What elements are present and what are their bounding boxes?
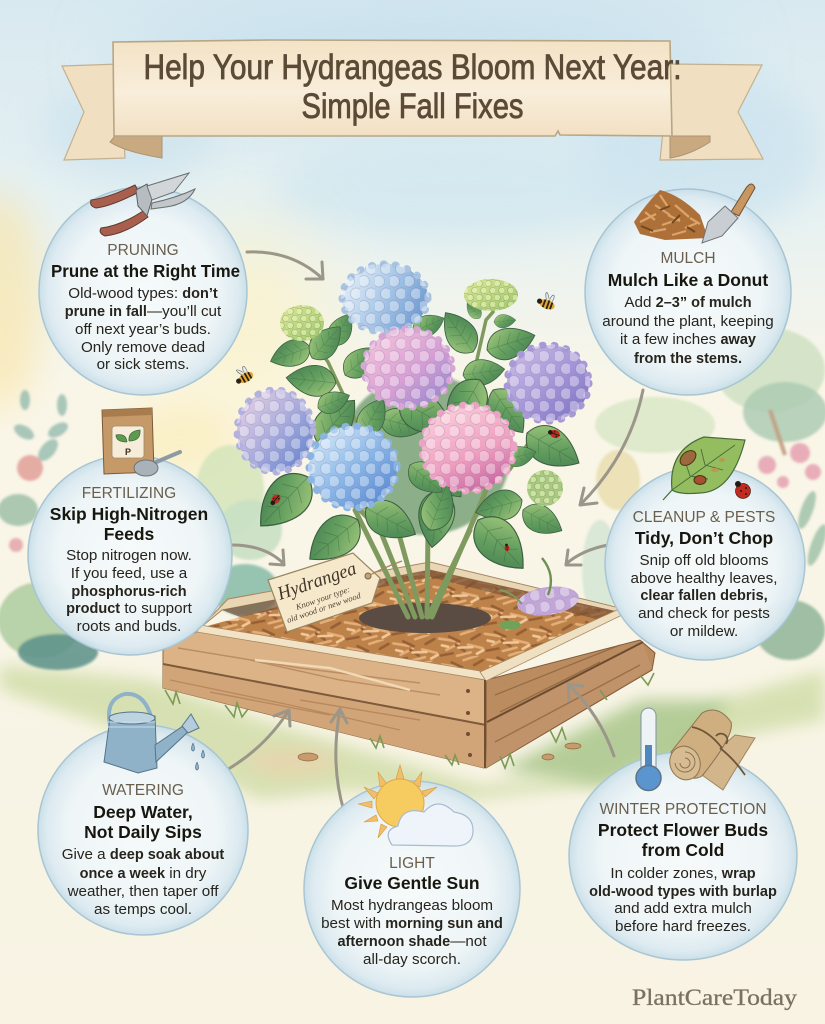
body text: above healthy leaves, bbox=[631, 570, 777, 587]
logo: PlantCareToday bbox=[632, 985, 797, 1011]
body text: If you feed, use a bbox=[71, 565, 188, 582]
title: Help Your Hydrangeas Bloom Next Year: bbox=[144, 48, 682, 87]
body text: product to support bbox=[66, 600, 193, 617]
soil mound bbox=[359, 603, 491, 633]
green buds bbox=[280, 279, 563, 506]
heading: Mulch Like a Donut bbox=[608, 270, 768, 290]
body text: Most hydrangeas bloom bbox=[331, 897, 493, 914]
heading: Tidy, Don’t Chop bbox=[635, 528, 773, 548]
icon: sun and cloud bbox=[358, 765, 473, 846]
background garden left bbox=[0, 390, 282, 670]
body text bbox=[602, 294, 774, 367]
body text bbox=[631, 552, 777, 640]
body text: weather, then taper off bbox=[67, 883, 219, 900]
body text: roots and buds. bbox=[77, 618, 181, 635]
leaves bbox=[246, 299, 588, 582]
arrow: fertilizing to bed bbox=[232, 545, 284, 565]
icon: watering can bbox=[104, 694, 204, 773]
body text bbox=[65, 285, 222, 373]
heading: Skip High-Nitrogen bbox=[50, 504, 208, 524]
raised wooden bed with mulch bbox=[163, 562, 655, 768]
foliage mass bbox=[340, 375, 510, 535]
back rim bbox=[200, 562, 620, 628]
body text: before hard freezes. bbox=[615, 918, 751, 935]
drooping spent bloom bbox=[499, 558, 581, 630]
body text: from the stems. bbox=[634, 351, 742, 367]
panel: fertilizing: Feeds bbox=[104, 524, 155, 544]
background garden right bbox=[582, 328, 825, 660]
plant tag: Know your type: bbox=[293, 584, 351, 612]
flower: large pink bbox=[421, 404, 515, 492]
body text: Snip off old blooms bbox=[640, 552, 769, 569]
label: WATERING bbox=[102, 782, 184, 799]
arrow: cleanup to bed bbox=[566, 545, 608, 565]
ground washes bbox=[0, 665, 825, 800]
label: LIGHT bbox=[389, 855, 435, 872]
ribbon body bbox=[113, 40, 672, 136]
body text: In colder zones, wrap bbox=[610, 865, 756, 882]
label: MULCH bbox=[660, 250, 716, 267]
ribbon left tail bbox=[62, 64, 125, 160]
panel: winter protection bbox=[569, 708, 797, 960]
arrow: mulch to bed bbox=[580, 390, 643, 505]
label: PRUNING bbox=[107, 242, 179, 259]
body text: Only remove dead bbox=[81, 339, 205, 356]
body text: off next year’s buds. bbox=[75, 321, 211, 338]
panel: watering bbox=[38, 694, 248, 935]
body text: and check for pests bbox=[638, 605, 770, 622]
arrow: watering to bed bbox=[225, 710, 290, 771]
icon: mulch pile and trowel bbox=[634, 184, 755, 243]
body text: old-wood types with burlap bbox=[589, 884, 777, 900]
panel: pruning bbox=[39, 173, 247, 395]
icon: pruning shears bbox=[91, 173, 195, 236]
body text: it a few inches away bbox=[620, 331, 756, 348]
hydrangea plant bbox=[236, 263, 590, 630]
plant tag: old wood or new wood bbox=[285, 590, 363, 625]
panel: cleanup and pests bbox=[605, 437, 805, 660]
label: CLEANUP & PESTS bbox=[633, 509, 775, 526]
arrow: winter to bed bbox=[568, 684, 614, 756]
panel: mulch bbox=[585, 184, 791, 395]
icon: burlap roll bbox=[665, 710, 755, 790]
body text: all-day scorch. bbox=[363, 951, 461, 968]
heading: Give Gentle Sun bbox=[344, 873, 480, 893]
body text: as temps cool. bbox=[94, 901, 192, 918]
grass tufts bbox=[165, 673, 654, 768]
flower: right purple bbox=[506, 344, 590, 422]
bed interior mulch bbox=[200, 565, 620, 672]
flower: pink-purple bbox=[363, 328, 453, 408]
body text: or mildew. bbox=[670, 623, 738, 640]
label: FERTILIZING bbox=[82, 485, 176, 502]
body text bbox=[66, 547, 193, 635]
body text bbox=[321, 897, 503, 968]
panel: fertilizing bbox=[28, 408, 232, 655]
heading: Prune at the Right Time bbox=[51, 261, 240, 281]
body text: phosphorus-rich bbox=[71, 584, 187, 600]
body text: Give a deep soak about bbox=[62, 846, 224, 863]
body text: or sick stems. bbox=[97, 356, 189, 373]
top rim strip bbox=[197, 625, 486, 680]
flower: large blue bbox=[308, 425, 398, 509]
body text: prune in fall—you’ll cut bbox=[65, 303, 222, 320]
title banner bbox=[62, 40, 763, 160]
panel: winter protection: from Cold bbox=[642, 840, 724, 860]
icon: thermometer bbox=[636, 708, 661, 790]
flower: top blue bbox=[341, 263, 429, 333]
heading: Deep Water, bbox=[93, 802, 193, 822]
body text: best with morning sun and bbox=[321, 915, 503, 932]
flower: left lilac blue bbox=[236, 389, 314, 473]
body text: clear fallen debris, bbox=[640, 588, 768, 604]
icon: fertilizer bag and scoop bbox=[102, 408, 180, 476]
body text: Add 2–3” of mulch bbox=[624, 294, 752, 311]
plant tag: Hydrangea bbox=[274, 558, 359, 605]
body text: once a week in dry bbox=[80, 865, 207, 882]
label: WINTER PROTECTION bbox=[599, 801, 767, 818]
heading: Protect Flower Buds bbox=[598, 820, 768, 840]
body text: Stop nitrogen now. bbox=[66, 547, 192, 564]
body text: and add extra mulch bbox=[614, 900, 752, 917]
body text bbox=[62, 846, 224, 918]
title banner: Simple Fall Fixes bbox=[302, 87, 524, 126]
icon: leaf with beetles bbox=[663, 437, 750, 500]
body text: afternoon shade—not bbox=[337, 933, 487, 950]
panel: light bbox=[304, 765, 520, 997]
body text: Old-wood types: don’t bbox=[68, 285, 218, 302]
right rim strip bbox=[480, 610, 622, 681]
stems bbox=[308, 312, 530, 617]
plant tag bbox=[268, 553, 402, 632]
insects bbox=[231, 290, 561, 551]
left wood face bbox=[163, 630, 486, 768]
arrow: pruning to plant bbox=[247, 252, 323, 279]
ribbon right tail bbox=[660, 64, 763, 160]
body text bbox=[589, 865, 777, 935]
panel: watering: Not Daily Sips bbox=[84, 822, 202, 842]
icon: fertilizer bag and scoop: P bbox=[125, 447, 131, 457]
arrow: light to bed bbox=[331, 709, 347, 811]
body text: around the plant, keeping bbox=[602, 313, 774, 330]
right wood face bbox=[486, 640, 655, 768]
fallen leaves on ground bbox=[298, 743, 581, 761]
